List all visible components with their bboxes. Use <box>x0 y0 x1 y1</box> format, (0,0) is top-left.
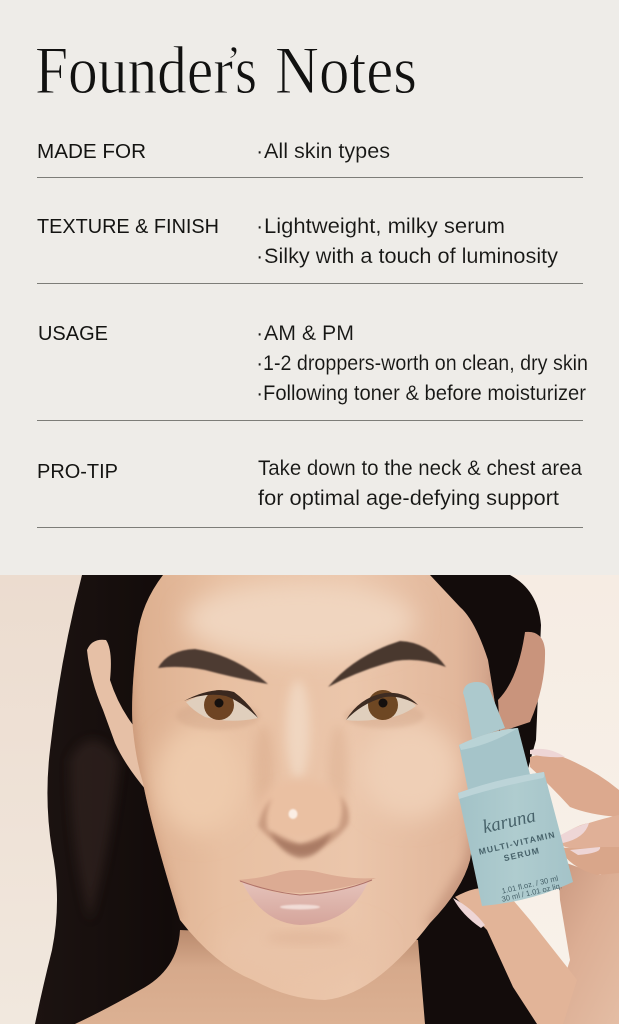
row: pro-tip: for optimal age-defying support <box>258 486 559 510</box>
row: pro-tip: PRO-TIP <box>37 460 118 483</box>
bottle labels: SERUM <box>503 845 541 863</box>
nails <box>453 749 600 928</box>
bottle labels: MULTI-VITAMIN <box>478 829 557 857</box>
dropper <box>463 682 505 739</box>
row: usage: · <box>256 351 263 375</box>
row: usage: · <box>256 381 263 405</box>
bottle labels: 1.01 fl.oz. / 30 ml <box>501 874 559 896</box>
hand <box>453 749 619 1024</box>
row: pro-tip: Take down to the neck & chest area <box>258 456 582 480</box>
photo: woman holding serum <box>0 575 619 1024</box>
palm <box>560 864 619 1024</box>
row: texture and finish: · <box>256 244 263 268</box>
row: usage <box>38 321 588 405</box>
row: texture and finish: Lightweight, milky serum <box>264 214 505 238</box>
title: ’ <box>226 36 241 87</box>
title: Notes <box>275 32 417 108</box>
row: pro-tip <box>37 456 582 510</box>
bottle labels: 30 ml / 1.01 oz liq. <box>501 881 563 904</box>
title: s <box>235 32 257 108</box>
ear: right <box>498 632 545 732</box>
hair <box>35 575 560 1024</box>
collar <box>459 728 530 790</box>
row: usage: USAGE <box>38 322 108 345</box>
row: usage: 1-2 droppers-worth on clean, dry skin <box>263 351 588 375</box>
eye: left <box>176 690 260 730</box>
row: made for: MADE FOR <box>37 140 146 163</box>
row: texture and finish: TEXTURE & FINISH <box>37 215 219 238</box>
serum bottle <box>458 682 573 906</box>
nose <box>257 798 351 860</box>
row: texture and finish <box>37 214 558 268</box>
row: usage: AM & PM <box>264 321 354 345</box>
row: usage: Following toner & before moisturizer <box>263 381 586 405</box>
eyebrow: left <box>158 649 268 684</box>
bottle body <box>458 772 573 906</box>
eye: right <box>344 690 424 728</box>
row: made for: · <box>256 139 263 163</box>
lips <box>238 870 376 925</box>
ring finger <box>558 847 619 875</box>
face <box>110 575 510 1000</box>
row: usage: · <box>256 321 263 345</box>
row: made for: All skin types <box>264 139 390 163</box>
bottle labels: karuna <box>481 805 538 838</box>
thumb <box>455 888 577 1024</box>
index finger <box>530 754 619 817</box>
middle finger <box>562 816 619 848</box>
title: Founder <box>35 32 233 108</box>
panel: founder's notes <box>0 0 619 575</box>
bottle labels <box>478 812 562 902</box>
row: made for <box>37 139 390 163</box>
title <box>35 32 417 108</box>
ear: left <box>87 640 146 790</box>
row: texture and finish: · <box>256 214 263 238</box>
row: texture and finish: Silky with a touch of luminosity <box>264 244 558 268</box>
neck <box>75 930 425 1024</box>
eyebrow: right <box>328 641 446 687</box>
